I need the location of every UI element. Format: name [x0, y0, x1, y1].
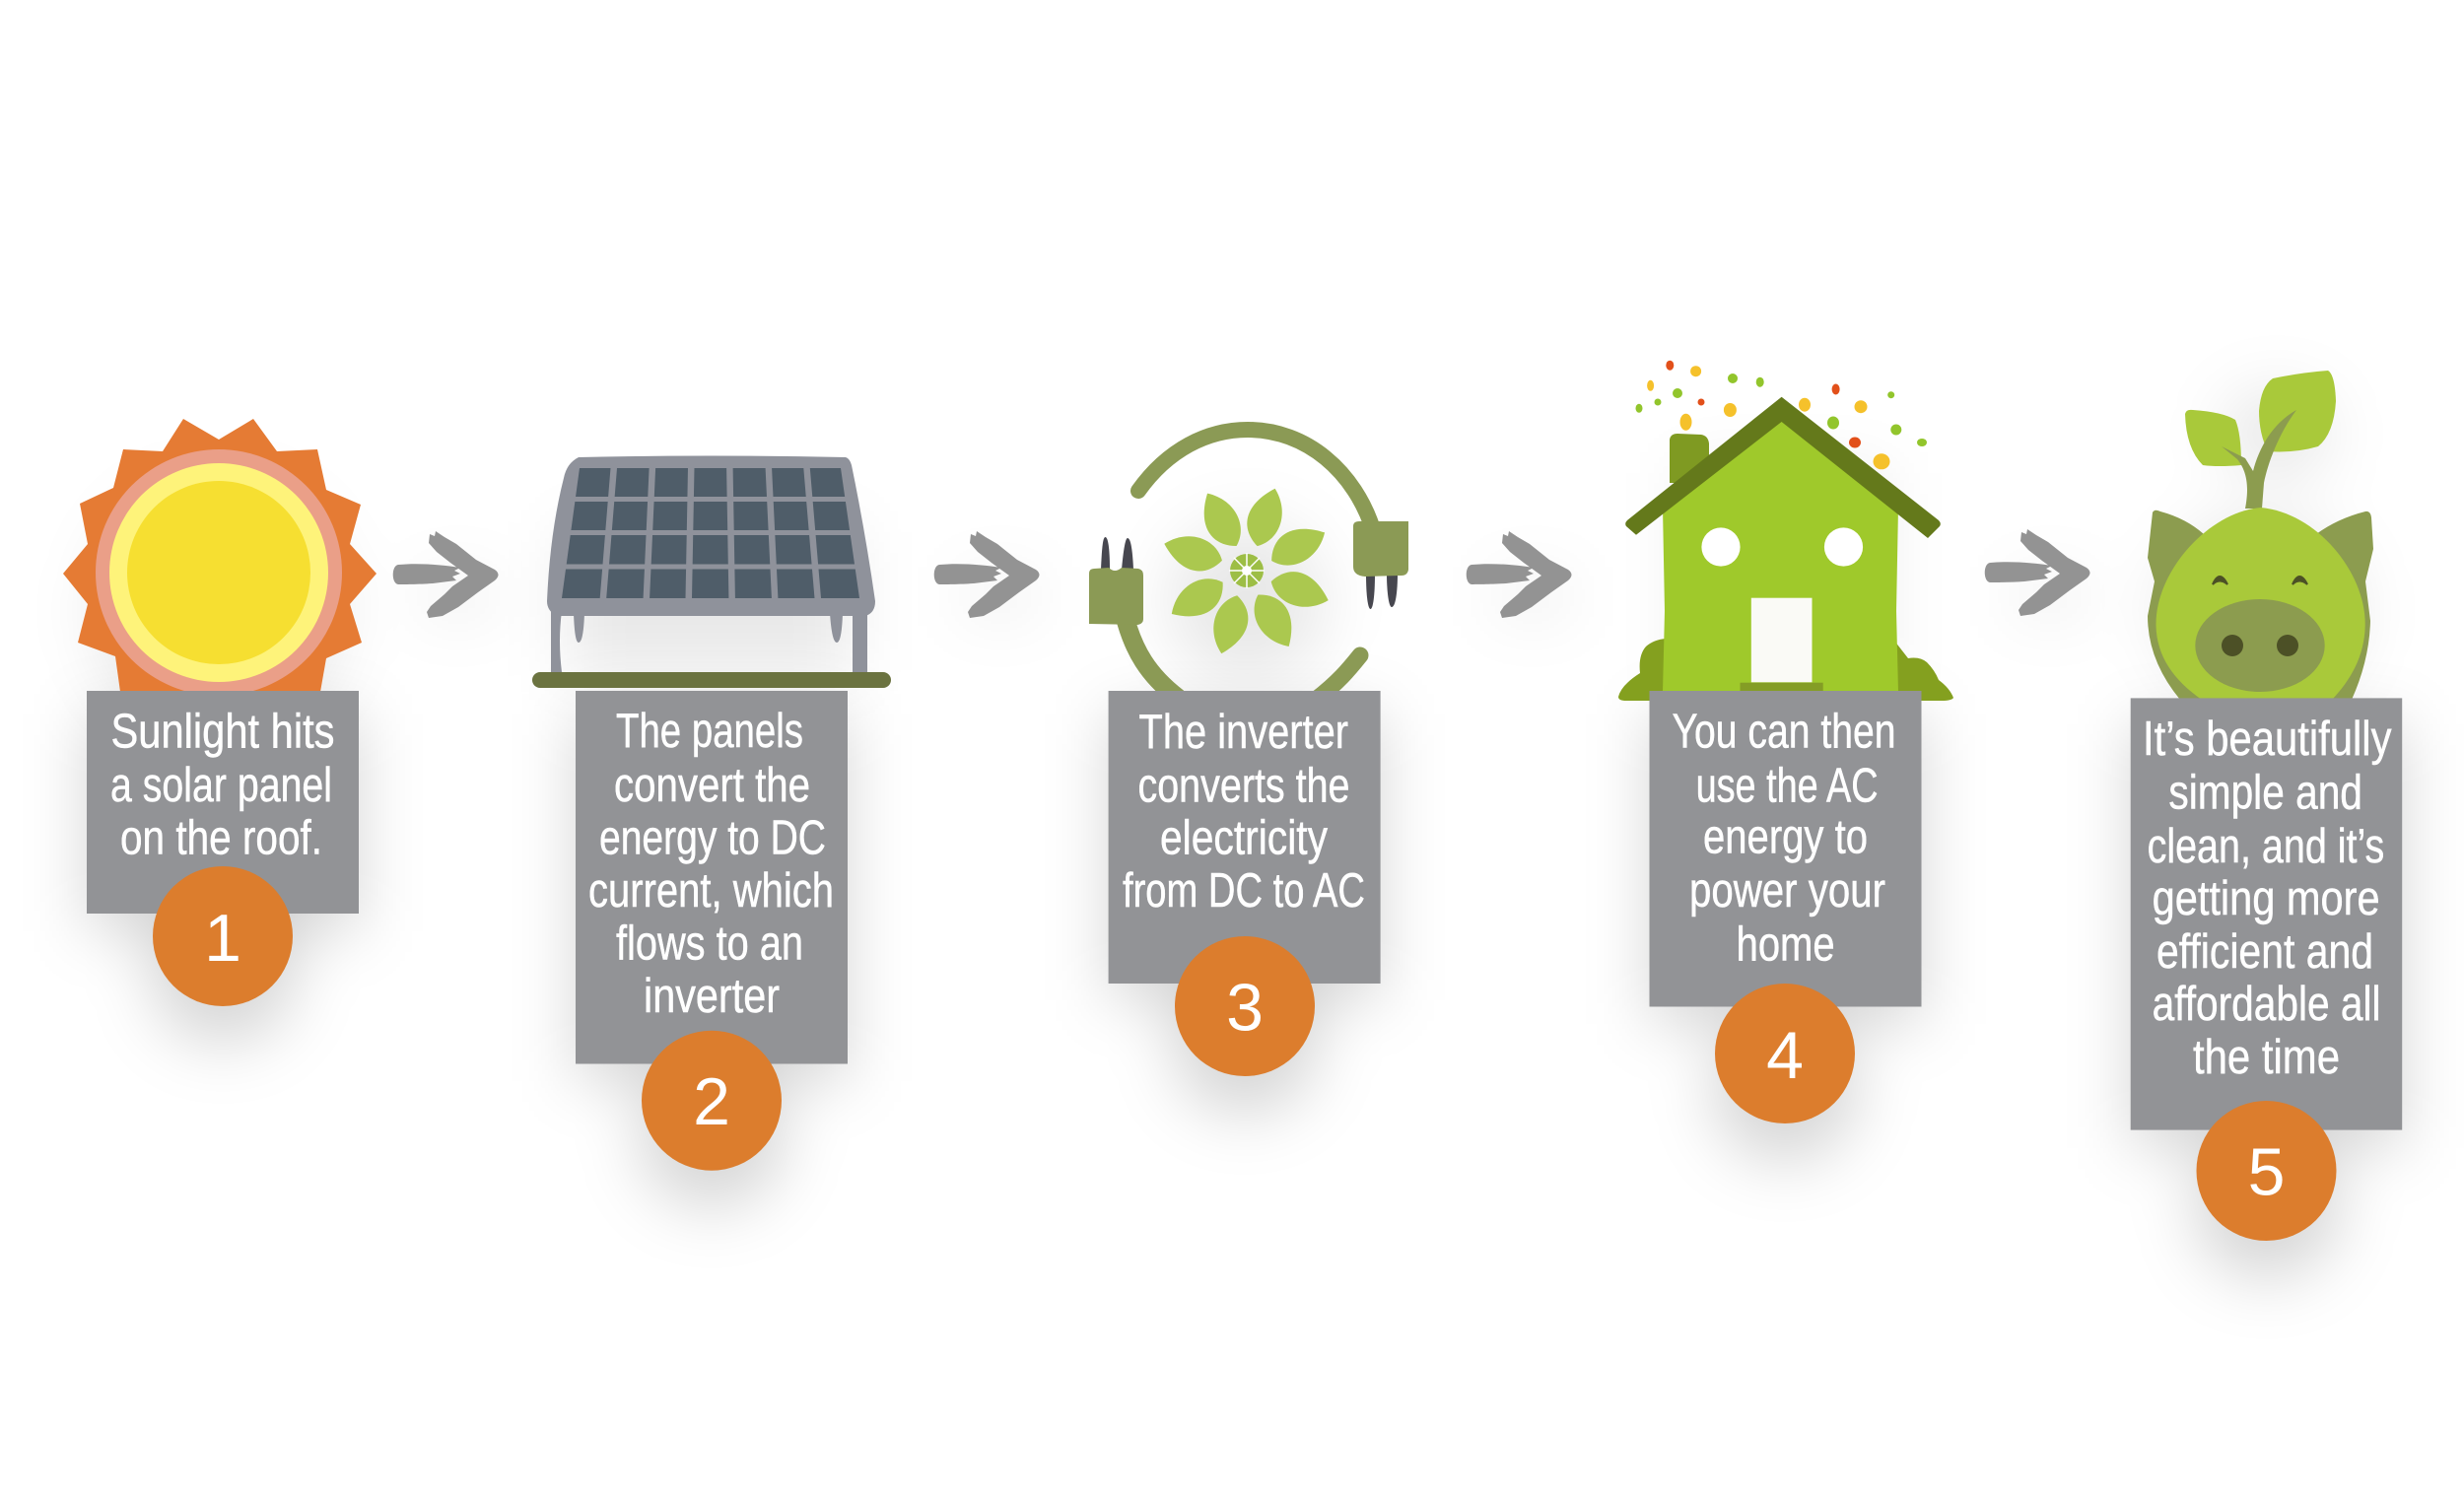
icon: piggy bank with sprout [2148, 371, 2373, 700]
text box: step 4: power your [1689, 864, 1885, 918]
icon: house with confetti [1618, 361, 1953, 701]
step 4: house [1618, 361, 1953, 1123]
step 5: savings [2131, 371, 2402, 1241]
number badge 3: 3 [1226, 970, 1264, 1045]
text box: step 1: a solar panel [110, 759, 332, 812]
text box: step 5: getting more [2153, 872, 2380, 925]
text box: step 2: energy to DC [599, 812, 826, 865]
text box: step 4: use the AC [1696, 760, 1879, 813]
text box: step 5: affordable all [2153, 978, 2381, 1031]
text box: step 5: efficient and [2156, 925, 2373, 979]
arrow 4 [1985, 529, 2089, 616]
text box: step 5: simple and [2168, 767, 2362, 820]
number badge 1: 1 [204, 901, 241, 976]
number badge 5 [2196, 1101, 2336, 1241]
arrow 3 [1467, 531, 1571, 618]
icon: sun [63, 419, 376, 696]
icon: solar panel [532, 455, 891, 688]
text box: step 2: inverter [644, 970, 780, 1023]
step 3: inverter [1089, 430, 1408, 1076]
text box: step 3: from DC to AC [1123, 864, 1365, 918]
step 2: solar panel [532, 455, 891, 1171]
text box: step 2 [576, 691, 848, 1064]
step 1: sunlight [63, 419, 376, 1006]
number badge 2: 2 [693, 1064, 730, 1139]
text box: step 5: the time [2193, 1031, 2340, 1084]
number badge 5: 5 [2248, 1135, 2285, 1210]
text box: step 1: on the roof. [120, 812, 322, 865]
number badge 4: 4 [1766, 1018, 1804, 1093]
icon: plug cord and flower [1089, 430, 1408, 700]
text box: step 3: The inverter [1139, 706, 1348, 759]
number badge 3 [1175, 936, 1315, 1076]
number badge 4 [1715, 984, 1855, 1123]
text box: step 1: Sunlight hits [110, 706, 335, 759]
text box: step 4: energy to [1703, 811, 1868, 864]
text box: step 3 [1109, 691, 1381, 984]
text box: step 5 [2131, 698, 2402, 1130]
text box: step 1 [87, 691, 359, 914]
text box: step 2: The panels [616, 705, 803, 758]
arrow 2 [934, 531, 1039, 618]
text box: step 2: current, which [588, 864, 834, 918]
text box: step 4: You can then [1672, 706, 1896, 759]
text box: step 4: home [1737, 918, 1835, 971]
number badge 2 [642, 1031, 782, 1171]
text box: step 5: clean, and it’s [2148, 820, 2384, 873]
text box: step 2: flows to an [616, 918, 803, 971]
text box: step 5: It’s beautifully [2143, 713, 2392, 766]
text box: step 3: electricity [1160, 812, 1328, 865]
text box: step 4 [1650, 691, 1922, 1007]
text box: step 3: converts the [1137, 759, 1350, 812]
arrow 1 [393, 531, 499, 618]
text box: step 2: convert the [614, 759, 810, 812]
number badge 1 [153, 866, 293, 1006]
